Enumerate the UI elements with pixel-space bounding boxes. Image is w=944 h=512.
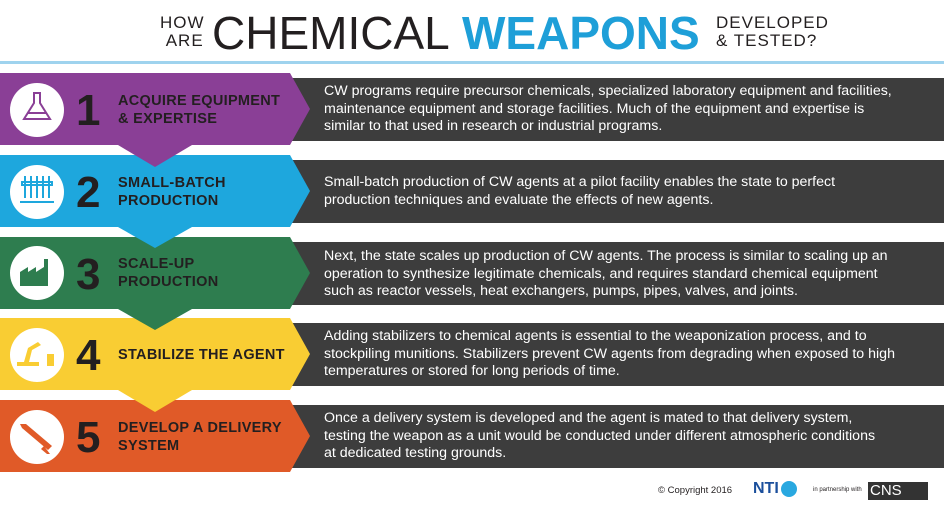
step 4: Adding stabilizers to chemical agents is essential to the weaponization process, and to [324, 328, 867, 344]
icon: test tubes [20, 176, 54, 202]
step 3: such as reactor vessels, heat exchangers, pumps, pipes, valves, and joints. [324, 283, 798, 299]
icon: factory [20, 259, 48, 286]
title: WEAPONS [462, 7, 700, 59]
title: ARE [166, 31, 204, 50]
step 3: PRODUCTION [118, 274, 218, 290]
step 5: DEVELOP A DELIVERY [118, 420, 282, 436]
icon: flask [24, 93, 50, 119]
step 5: SYSTEM [118, 438, 179, 454]
footer: in partnership with [813, 487, 862, 493]
step 4: STABILIZE THE AGENT [118, 347, 285, 363]
step 1: similar to that used in research or industrial programs. [324, 118, 662, 134]
footer: CNS [870, 482, 902, 499]
step 4: temperatures or stored for long periods of time. [324, 363, 620, 379]
icon: rocket [20, 424, 52, 454]
title [160, 7, 829, 59]
step 3: 3 [76, 250, 100, 299]
step 5: at dedicated testing grounds. [324, 445, 506, 461]
step 4 [76, 328, 895, 380]
step 1: 1 [76, 86, 100, 135]
step 1 [76, 83, 892, 135]
step 3 [76, 248, 888, 299]
step 5: 5 [76, 413, 100, 462]
title: DEVELOPED [716, 13, 829, 32]
title: & TESTED? [716, 31, 817, 50]
step 2: 2 [76, 168, 100, 217]
step 1: CW programs require precursor chemicals, specialized laboratory equipment and facilities, [324, 83, 892, 99]
step 3: SCALE-UP [118, 256, 195, 272]
step 3: Next, the state scales up production of CW agents. The process is similar to scaling up an [324, 248, 888, 264]
step 2: PRODUCTION [118, 193, 218, 209]
title: HOW [160, 13, 205, 32]
step 4: 4 [76, 331, 100, 380]
title: CHEMICAL [212, 7, 450, 59]
step 4: stockpiling munitions. Stabilizers prevent CW agents from degrading when exposed to high [324, 346, 895, 362]
step 2: production techniques and evaluate the effects of new agents. [324, 192, 713, 208]
step 1: ACQUIRE EQUIPMENT [118, 93, 280, 109]
step 1: & EXPERTISE [118, 111, 217, 127]
footer: NTI [753, 480, 779, 497]
step 2: SMALL-BATCH [118, 175, 226, 191]
icon: robot arm [17, 342, 54, 366]
step 5: Once a delivery system is developed and the agent is mated to that delivery system, [324, 410, 852, 426]
footer: © Copyright 2016 [658, 485, 732, 496]
step 5: testing the weapon as a unit would be conducted under different atmospheric conditions [324, 428, 875, 444]
footer [658, 480, 928, 500]
step 2: Small-batch production of CW agents at a pilot facility enables the state to perfect [324, 174, 835, 190]
step 1: maintenance equipment and storage facilities. Much of the equipment and expertise is [324, 100, 864, 116]
step 5 [76, 410, 875, 462]
step 3: operation to synthesize legitimate chemicals, and requires standard chemical equipment [324, 266, 878, 282]
step 2 [76, 168, 835, 217]
